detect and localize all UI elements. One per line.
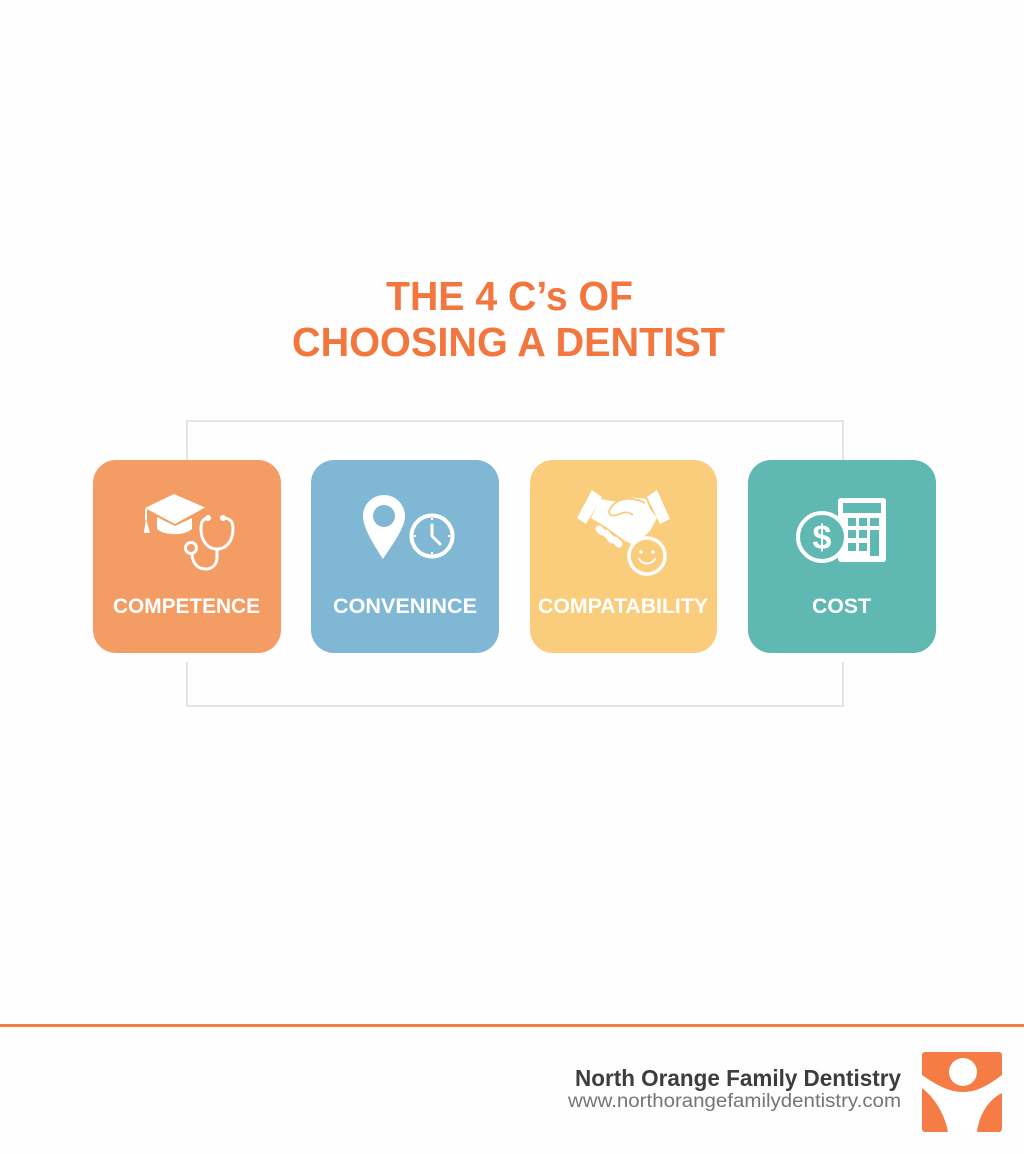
title (292, 273, 725, 365)
title: THE 4 C’s OF (386, 273, 633, 319)
icon: logo (922, 1052, 1002, 1132)
panel: convenience (311, 460, 499, 653)
label: cost: COST (812, 595, 871, 618)
label: compatability: COMPATABILITY (538, 595, 708, 618)
footer rule (0, 1024, 1024, 1027)
icon: coin and calculator (798, 498, 886, 562)
label: convenience: CONVENINCE (333, 595, 477, 618)
title: CHOOSING A DENTIST (292, 319, 725, 365)
footer brand name: North Orange Family Dentistry (575, 1065, 901, 1091)
icon: handshake and smiley (577, 490, 670, 574)
icon: graduation cap and stethoscope (144, 494, 233, 569)
label: competence: COMPETENCE (113, 595, 260, 618)
panel: competence (93, 460, 281, 653)
panel: cost (748, 460, 936, 653)
icon: map pin and clock (363, 495, 452, 559)
connector frame (187, 421, 843, 706)
panel: compatibility (530, 460, 717, 653)
footer website: www.northorangefamilydentistry.com (567, 1091, 901, 1112)
icon: coin and calculator: $ (813, 519, 832, 557)
